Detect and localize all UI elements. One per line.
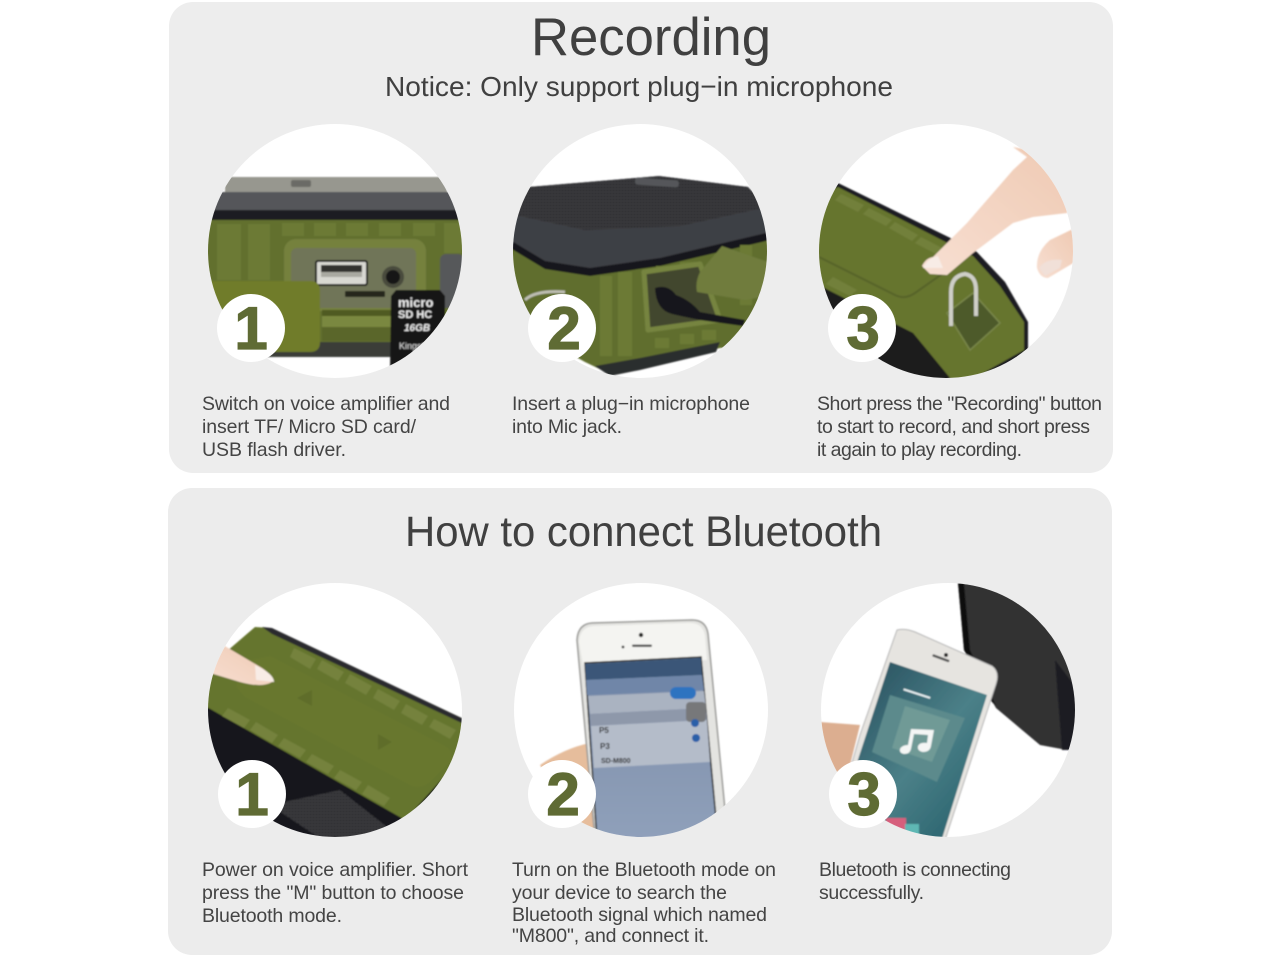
- step 3 text: to start to record, and short press: [817, 416, 1090, 438]
- panel: how to connect Bluetooth: [168, 488, 1112, 955]
- step 1 text: Switch on voice amplifier and: [202, 393, 450, 415]
- title: Recording: Recording: [531, 8, 771, 67]
- badge: step 1: 1: [235, 761, 269, 828]
- badge: step 3: [829, 760, 897, 828]
- badge: step 1: 1: [234, 295, 268, 362]
- step 2 text: [512, 393, 750, 438]
- step 2 text: your device to search the: [512, 882, 727, 904]
- step 2 text: [512, 859, 776, 947]
- photo: Bluetooth step 1, pressing M button: [208, 583, 462, 837]
- badge: step 3: [828, 294, 896, 362]
- photo: Bluetooth step 2, phone Bluetooth list: SD-M800: [601, 758, 631, 765]
- step 3 text: it again to play recording.: [817, 439, 1022, 461]
- photo: recording step 1, ports and micro SD card: micro: [398, 295, 433, 310]
- photo: recording step 3, pressing record button: [815, 124, 1075, 390]
- photo: Bluetooth step 3, music playing: [815, 583, 1080, 845]
- step 3 text: [819, 859, 1011, 904]
- photo: recording step 2, plug-in microphone: [510, 124, 770, 378]
- step 2 text: Turn on the Bluetooth mode on: [512, 859, 776, 881]
- photo: recording step 1, ports and micro SD card: [205, 124, 467, 378]
- badge: step 2: 2: [547, 295, 581, 362]
- step 3 text: Short press the "Recording" button: [817, 393, 1102, 415]
- photo: recording step 1, ports and micro SD card: SD HC: [398, 309, 432, 321]
- icon: music note: [900, 729, 934, 754]
- badge: step 1: [217, 294, 285, 362]
- panel: recording: [169, 2, 1113, 473]
- badge: step 2: [528, 294, 596, 362]
- step 2 text: into Mic jack.: [512, 416, 622, 438]
- step 2 text: Bluetooth signal which named: [512, 904, 767, 926]
- photo: recording step 1, ports and micro SD card: 16GB: [404, 323, 430, 334]
- photo: Bluetooth step 2, phone Bluetooth list: P5: [599, 726, 609, 735]
- step 1 text: Power on voice amplifier. Short: [202, 859, 469, 881]
- photo: Bluetooth step 2, phone Bluetooth list: [514, 583, 768, 850]
- subtitle: notice: Notice: Only support plug−in microphone: [385, 71, 893, 102]
- badge: step 3: 3: [846, 295, 880, 362]
- step 1 text: [202, 393, 450, 461]
- step 2 text: Insert a plug−in microphone: [512, 393, 750, 415]
- badge: step 1: [218, 760, 286, 828]
- photo: Bluetooth step 2, phone Bluetooth list: P3: [600, 742, 610, 751]
- step 1 text: [202, 859, 469, 927]
- title: How to connect Bluetooth: How to connect Bluetooth: [405, 508, 882, 556]
- badge: step 3: 3: [847, 761, 881, 828]
- step 1 text: USB flash driver.: [202, 439, 346, 461]
- step 3 text: successfully.: [819, 882, 924, 904]
- step 3 text: [817, 393, 1102, 461]
- step 2 text: "M800", and connect it.: [512, 925, 709, 947]
- badge: step 2: [528, 760, 596, 828]
- badge: step 2: 2: [546, 761, 580, 828]
- step 1 text: insert TF/ Micro SD card/: [202, 416, 417, 438]
- step 1 text: press the "M" button to choose: [202, 882, 464, 904]
- step 1 text: Bluetooth mode.: [202, 905, 342, 927]
- step 3 text: Bluetooth is connecting: [819, 859, 1011, 881]
- photo: recording step 1, ports and micro SD card: Kingston: [399, 341, 434, 351]
